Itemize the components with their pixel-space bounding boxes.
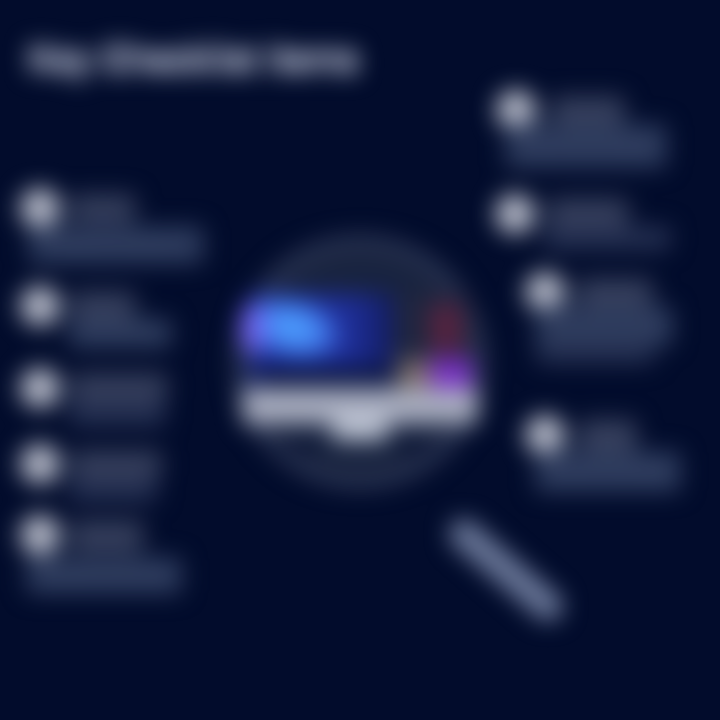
icon: laptop base	[242, 388, 478, 440]
title: Key Checklist Items	[28, 40, 359, 79]
item: right 1: Keyboard	[556, 103, 620, 119]
item: right 1: Keys and touchpad	[521, 138, 651, 154]
item: left 2: Ports	[85, 298, 121, 314]
item: left 1: Screen	[80, 200, 126, 216]
item: right 4: Service coverage	[550, 463, 666, 479]
item: left 4: Memory	[89, 456, 143, 472]
item: left 1	[4, 172, 214, 276]
item: right 2	[479, 177, 676, 260]
item: left 3	[4, 352, 177, 436]
item: right 3: and licences	[553, 346, 637, 362]
item: right 4	[509, 399, 691, 502]
item: right 3	[509, 255, 683, 373]
item: right 2: Exterior	[562, 205, 614, 221]
panel: left checklist	[4, 172, 214, 604]
item: left 4	[4, 428, 170, 512]
item: right 2: Hinges and casing	[545, 230, 669, 246]
item: left 4: Storage	[87, 481, 139, 497]
icon: magnifying glass over laptop	[220, 226, 576, 634]
icon: handle	[464, 534, 548, 606]
item: left 2: Connections	[78, 325, 162, 341]
item: left 1: Display resolution	[55, 237, 177, 253]
item: left 5: Battery	[83, 528, 131, 544]
item: left 5: Runtime and cycle	[42, 567, 166, 583]
item: right 1	[480, 74, 677, 180]
item: right 3: Software	[585, 285, 645, 301]
item: left 5	[4, 498, 192, 604]
item: right 3: Operating system	[545, 318, 663, 334]
item: left 3: Speed tests	[78, 405, 156, 421]
panel: right checklist	[479, 74, 691, 502]
icon: laptop screen	[236, 287, 472, 390]
icon: shadow under laptop	[280, 439, 436, 453]
icon: lens	[240, 242, 480, 482]
item: left 3: Processor	[85, 379, 153, 395]
item: left 2	[4, 269, 180, 359]
